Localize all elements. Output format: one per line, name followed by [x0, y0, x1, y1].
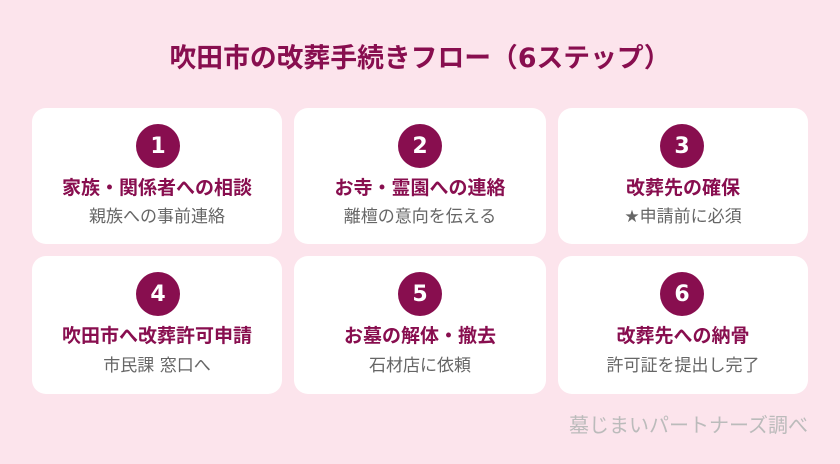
- heading: step 5: お墓の解体・撤去: [344, 325, 496, 347]
- heading: step 1: 家族・関係者への相談: [62, 177, 252, 199]
- step number 3: [660, 124, 704, 168]
- description: step 2: 離檀の意向を伝える: [344, 207, 496, 227]
- step number 5: 5: [412, 282, 428, 307]
- step number 5: [398, 272, 442, 316]
- step number 1: [136, 124, 180, 168]
- panel: step 1: [32, 108, 282, 244]
- panel: step 4: [32, 256, 282, 394]
- description: step 5: 石材店に依頼: [369, 356, 471, 376]
- step number 2: 2: [412, 134, 428, 159]
- step number 6: 6: [674, 282, 690, 307]
- step number 2: [398, 124, 442, 168]
- heading: step 4: 吹田市へ改葬許可申請: [62, 325, 252, 347]
- panel: step 2: [294, 108, 546, 244]
- description: step 3: ★申請前に必須: [624, 207, 742, 227]
- step number 6: [660, 272, 704, 316]
- heading: step 6: 改葬先への納骨: [616, 325, 750, 347]
- heading: step 2: お寺・霊園への連絡: [334, 177, 506, 199]
- panel: step 6: [558, 256, 808, 394]
- heading: step 3: 改葬先の確保: [626, 177, 740, 199]
- panel: step 3: [558, 108, 808, 244]
- description: step 1: 親族への事前連絡: [89, 207, 225, 227]
- step number 4: 4: [150, 282, 166, 307]
- panel: step 5: [294, 256, 546, 394]
- step number 4: [136, 272, 180, 316]
- source note: 墓じまいパートナーズ調べ: [569, 413, 808, 437]
- description: step 6: 許可証を提出し完了: [606, 356, 760, 376]
- title: 吹田市の改葬手続きフロー（6ステップ）: [170, 43, 670, 74]
- description: step 4: 市民課 窓口へ: [103, 356, 211, 376]
- step number 1: 1: [150, 134, 166, 159]
- step number 3: 3: [674, 134, 690, 159]
